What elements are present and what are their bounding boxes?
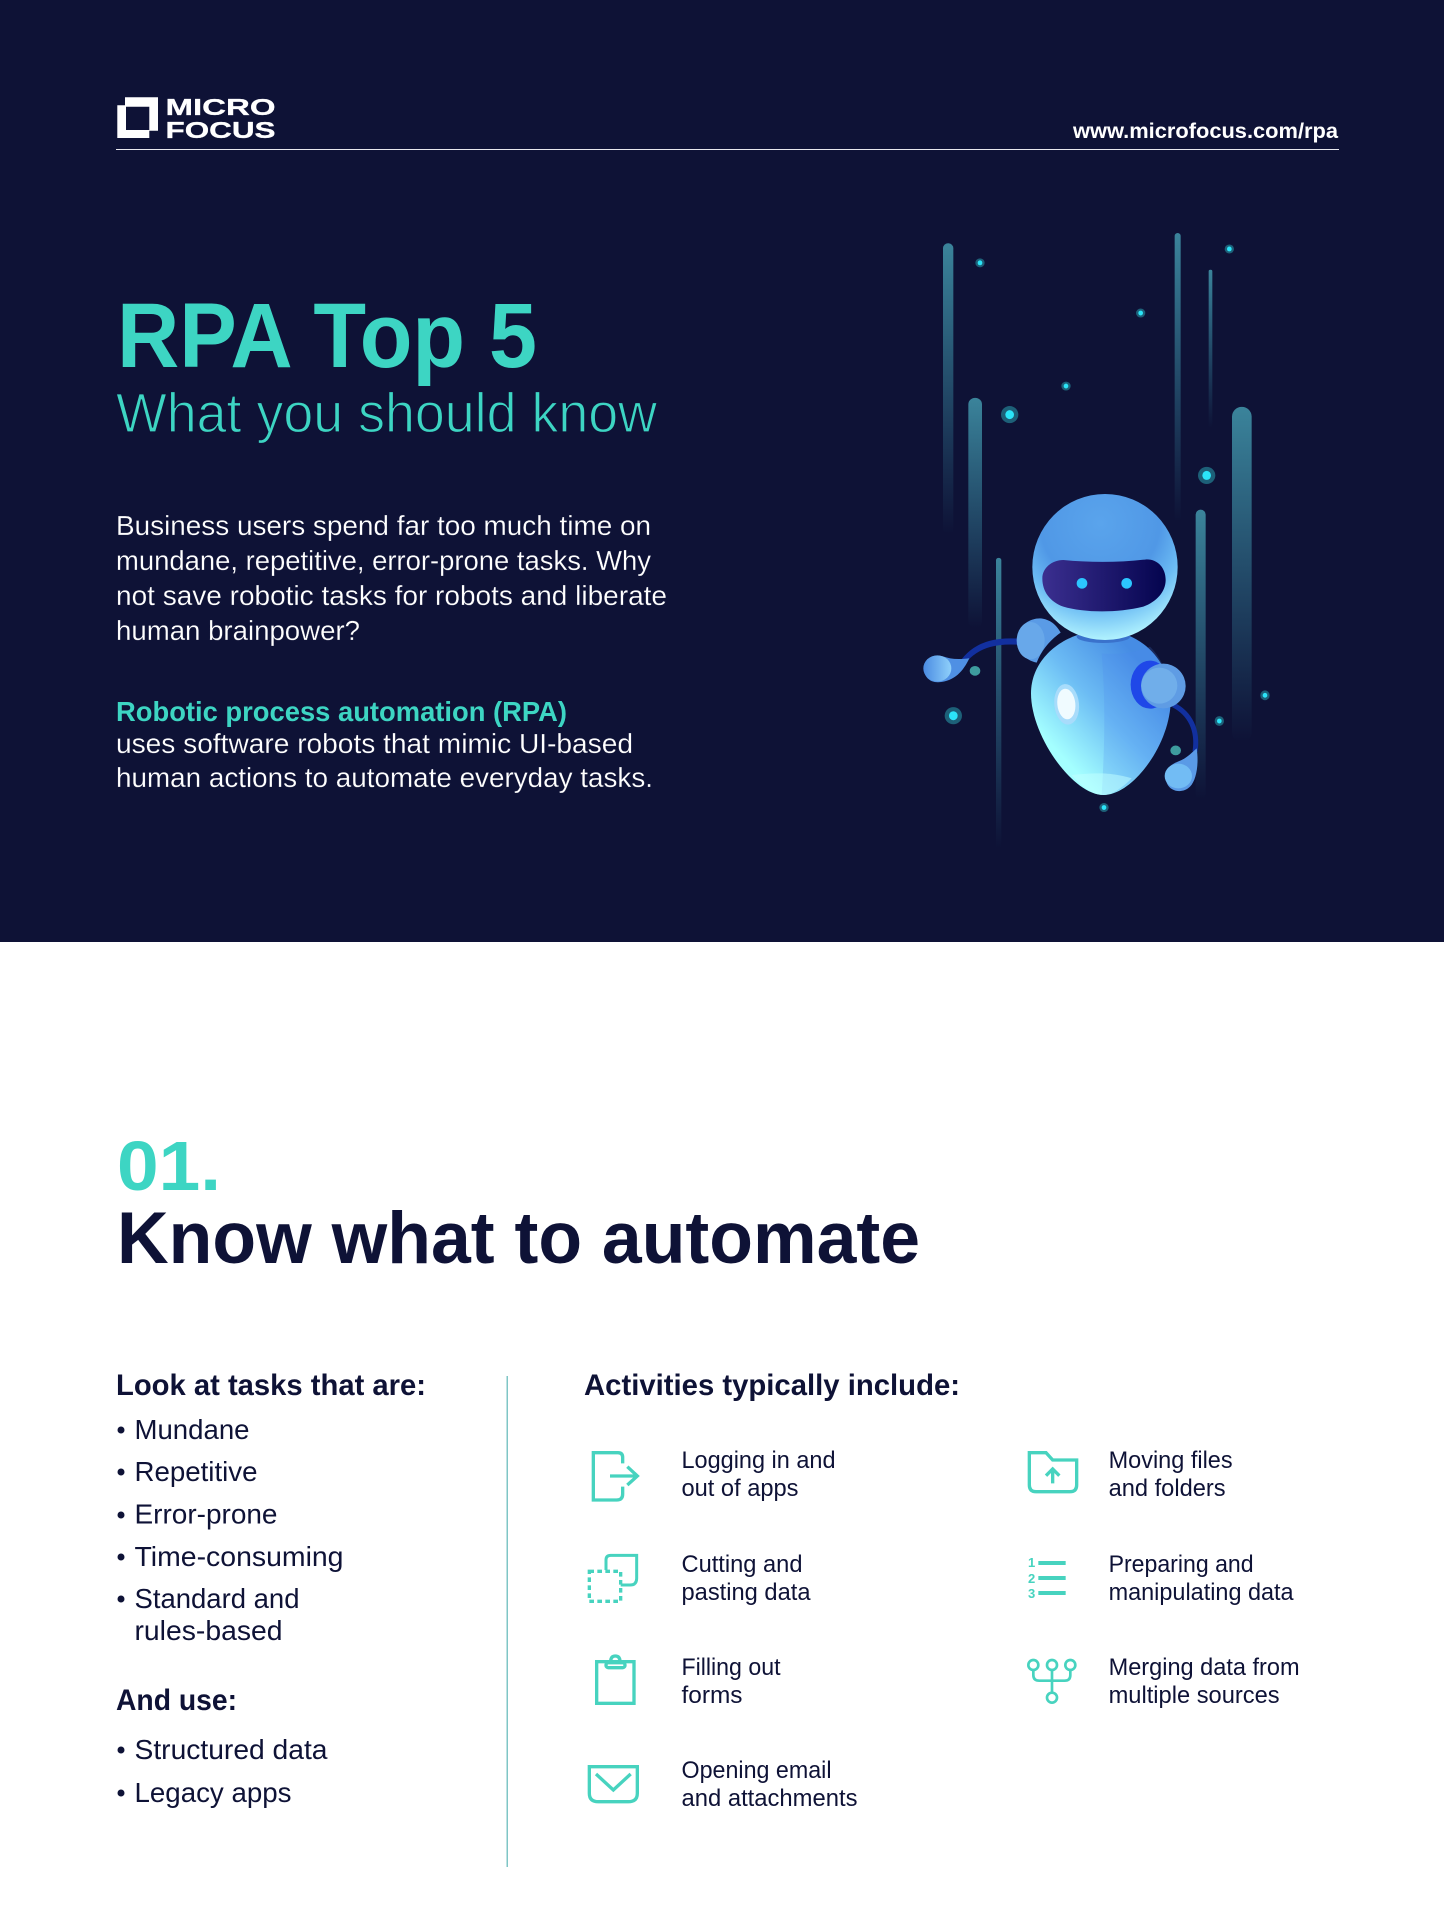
light streaks and dots — [923, 233, 1270, 848]
icon: clipboard — [597, 1656, 634, 1703]
RPA definition: human actions to automate everyday tasks. — [116, 762, 653, 793]
right column heading: Activities typically include: — [584, 1369, 960, 1402]
activity: preparing data: manipulating data — [1109, 1579, 1294, 1606]
activity: merging data — [1028, 1654, 1300, 1709]
bullet list: data types: Structured data — [134, 1734, 328, 1765]
activity: cutting and pasting: Cutting and — [682, 1551, 802, 1578]
subtitle: What you should know — [116, 381, 658, 444]
icon: numbered list: 1 — [1028, 1555, 1035, 1570]
intro paragraph: Business users spend far too much time on — [116, 510, 651, 541]
activity: preparing data: Preparing and — [1109, 1551, 1254, 1578]
activity: logging in — [593, 1447, 836, 1502]
activity: cutting and pasting: pasting data — [682, 1579, 811, 1606]
activity: opening email — [589, 1757, 858, 1812]
website url: www.microfocus.com/rpa — [1072, 120, 1338, 143]
activity: filling out forms: Filling out — [682, 1654, 781, 1681]
bullet list: task traits: Repetitive — [134, 1456, 258, 1487]
panel: dark header background — [0, 0, 1444, 942]
icon: envelope — [589, 1767, 637, 1802]
activity: moving files: Moving files — [1109, 1447, 1233, 1474]
logo: Micro Focus: MICRO — [166, 94, 276, 120]
illustration: robot among light streaks — [923, 233, 1270, 848]
icon: numbered list: 3 — [1028, 1586, 1035, 1601]
logo: Micro Focus — [117, 94, 276, 143]
bullet list: task traits: rules-based — [134, 1615, 282, 1646]
RPA definition: uses software robots that mimic UI-based — [116, 728, 633, 759]
subheading: look at tasks: Look at tasks that are: — [116, 1369, 426, 1402]
bullet list: data types: Legacy apps — [134, 1777, 292, 1808]
activity: logging in: out of apps — [682, 1475, 798, 1502]
activity: filling out forms — [597, 1654, 781, 1709]
subheading: and use: And use: — [116, 1684, 237, 1717]
icon: merging branches — [1028, 1660, 1075, 1703]
intro paragraph: mundane, repetitive, error-prone tasks. Why — [116, 545, 651, 576]
activity: opening email: and attachments — [682, 1785, 858, 1812]
left column: task criteria — [116, 1369, 426, 1808]
intro paragraph: not save robotic tasks for robots and liberate — [116, 580, 667, 611]
activity: moving files — [1029, 1447, 1233, 1502]
activity: logging in: Logging in and — [682, 1447, 836, 1474]
activity: opening email: Opening email — [682, 1757, 832, 1784]
intro paragraph — [116, 510, 667, 646]
bullet list: task traits — [118, 1414, 344, 1646]
bullet list: data types — [118, 1734, 328, 1808]
icon: copy squares — [589, 1555, 637, 1601]
RPA definition: Robotic process automation (RPA) — [116, 696, 567, 727]
activity: merging data: Merging data from — [1109, 1654, 1300, 1681]
icon: door with arrow — [593, 1453, 637, 1500]
icon: numbered list — [1028, 1555, 1066, 1601]
intro paragraph: human brainpower? — [116, 615, 360, 646]
icon: folder with up arrow — [1029, 1453, 1077, 1492]
activity: moving files: and folders — [1109, 1475, 1226, 1502]
bullet list: task traits: Error-prone — [134, 1498, 278, 1530]
section number: 01. — [117, 1127, 221, 1205]
section heading: Know what to automate — [117, 1198, 920, 1279]
logo: Micro Focus: FOCUS — [166, 117, 276, 143]
bullet list: task traits: Time-consuming — [134, 1541, 344, 1572]
robot — [1017, 494, 1198, 795]
activity: preparing data — [1028, 1551, 1294, 1606]
title: RPA Top 5 — [117, 285, 537, 387]
RPA definition — [116, 696, 653, 793]
activity: filling out forms: forms — [682, 1682, 742, 1709]
icon: numbered list: 2 — [1028, 1571, 1035, 1586]
activity: merging data: multiple sources — [1109, 1682, 1280, 1709]
bullet list: task traits: Mundane — [134, 1414, 250, 1445]
activity: cutting and pasting — [589, 1551, 811, 1606]
bullet list: task traits: Standard and — [134, 1583, 300, 1614]
